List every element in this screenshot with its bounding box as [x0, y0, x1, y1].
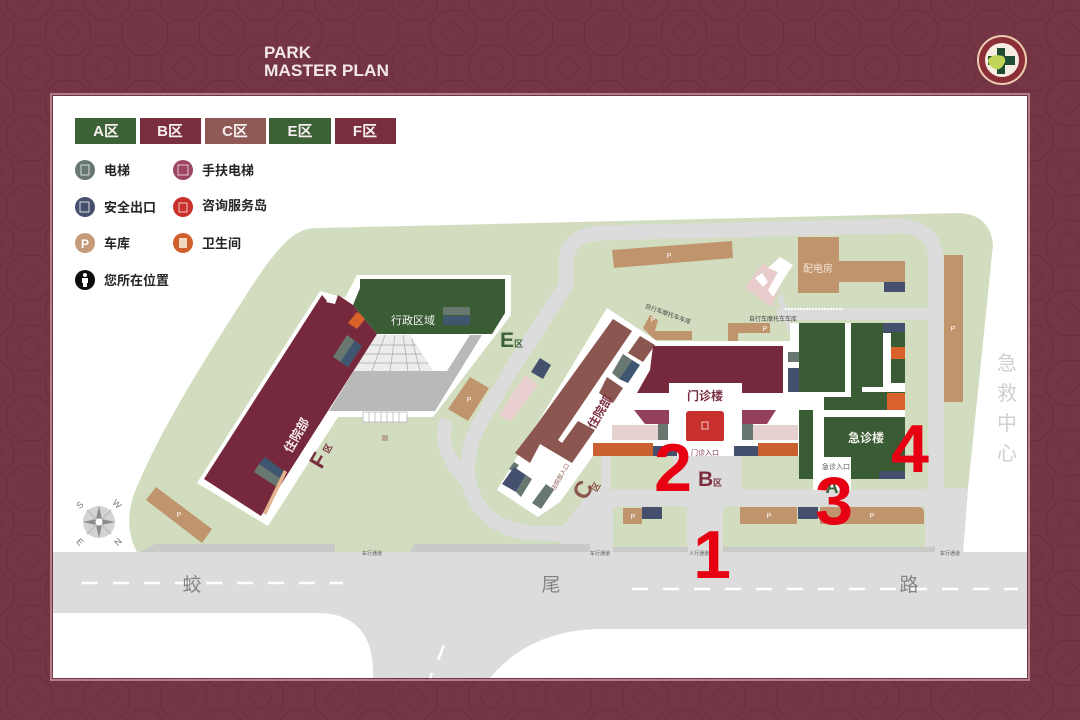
- red callout numbers: 1: [693, 517, 731, 593]
- emergency center label: 心: [997, 443, 1017, 465]
- main road: [53, 552, 1027, 678]
- parking labels: P: [177, 512, 182, 519]
- legend: facilities: 您所在位置: [104, 273, 169, 288]
- legend: facilities: 车库: [104, 236, 130, 251]
- parking labels: P: [870, 269, 875, 276]
- zone label: C: 区: [589, 481, 603, 493]
- legend: facilities: [75, 160, 267, 290]
- white base: emergency complex: [790, 323, 905, 490]
- parking labels: P: [767, 513, 772, 520]
- legend: zones: F区: [353, 123, 377, 140]
- zone label: E: 区: [514, 339, 523, 349]
- zone label: B: 区: [713, 478, 722, 488]
- parking labels: P: [763, 326, 768, 333]
- bike parking labels: 自行车摩托车车库: [749, 315, 797, 323]
- red callout numbers: [654, 411, 929, 593]
- pink pavilion and icon: [499, 358, 551, 422]
- legend: facilities: P: [81, 237, 89, 251]
- compass: W: [110, 497, 124, 511]
- zone label: A: A: [826, 477, 838, 497]
- bike parking labels: [644, 302, 797, 326]
- road name: [182, 574, 919, 596]
- road markings: [82, 583, 1018, 678]
- building: F zone inpatient: 住院部: [281, 415, 313, 455]
- parking labels: P: [467, 397, 472, 404]
- road gate labels: 人行通道: [689, 550, 709, 557]
- legend: facilities: 手扶电梯: [202, 163, 254, 178]
- legend: zones: C区: [222, 123, 248, 140]
- building: E zone admin: 行政区域: [391, 313, 435, 327]
- bike parking labels: 自行车摩托车车库: [644, 302, 692, 326]
- parking labels: P: [631, 514, 636, 521]
- legend: zones: E区: [287, 123, 313, 140]
- red callout numbers: 3: [815, 463, 853, 539]
- legend: zones: [75, 118, 396, 144]
- road junction areas: [560, 452, 968, 553]
- zone label: F: F: [304, 448, 333, 472]
- legend: zones: B区: [157, 123, 183, 140]
- building: emergency complex: [788, 323, 905, 479]
- road name: 蛟: [182, 574, 202, 596]
- zone label: B: [698, 468, 722, 491]
- parking labels: P: [667, 253, 672, 260]
- emergency center label: 急: [997, 352, 1017, 375]
- legend: zones: A区: [93, 123, 119, 140]
- green site ground: [129, 213, 993, 552]
- building: C zone white base: [497, 308, 800, 517]
- entrance steps: [363, 412, 407, 422]
- zone label: B: B: [698, 468, 713, 491]
- glass canopy grid: [354, 335, 433, 371]
- building: emergency complex: 急诊入口: [822, 462, 850, 471]
- building: C zone inpatient: [502, 319, 655, 509]
- emergency center label: [997, 352, 1017, 465]
- building: E zone admin: [353, 279, 505, 334]
- building: outpatient: [593, 346, 798, 457]
- building: outpatient: 门诊入口: [691, 448, 719, 457]
- road gate labels: 车行通道: [940, 550, 960, 557]
- paved plaza: [329, 335, 482, 411]
- white courtyard wedge: [410, 335, 470, 371]
- parking labels: [177, 253, 956, 521]
- parking lots: [146, 241, 963, 543]
- road gate labels: 车行通道: [362, 550, 382, 557]
- icon: hospital logo: [977, 35, 1027, 85]
- title: PARK: [264, 44, 311, 62]
- road name: 尾: [541, 575, 561, 596]
- power room: 配电房: [803, 262, 833, 275]
- road gate labels: [362, 550, 960, 557]
- zone label: F: 区: [321, 442, 334, 455]
- building: C zone inpatient: 住院部入口: [549, 462, 571, 492]
- emergency center label: 中: [997, 412, 1017, 435]
- legend: facilities: 电梯: [104, 163, 130, 178]
- zone label: E: E: [500, 329, 514, 352]
- building: outpatient: 门诊楼: [687, 388, 723, 403]
- site roads: [444, 226, 936, 552]
- building: C zone inpatient: 住院部: [584, 392, 615, 431]
- zone label: C: C: [567, 476, 599, 505]
- road name: 路: [899, 574, 919, 596]
- legend: facilities: 咨询服务岛: [202, 198, 267, 213]
- panel: map frame: [51, 94, 1029, 680]
- zone label: E: [500, 329, 523, 352]
- legend: facilities: 安全出口: [104, 200, 156, 215]
- power room: [798, 237, 905, 293]
- navy exit markers: [642, 282, 905, 519]
- emergency center label: 救: [997, 382, 1017, 405]
- red callout numbers: 4: [891, 411, 929, 487]
- red callout numbers: 2: [654, 430, 692, 506]
- compass: N: [112, 536, 124, 548]
- title: [264, 44, 389, 80]
- compass: E: [74, 536, 86, 548]
- parking labels: P: [651, 317, 656, 324]
- building: emergency complex: 急诊楼: [848, 430, 884, 445]
- parking labels: P: [951, 326, 956, 333]
- legend: facilities: 卫生间: [202, 236, 241, 251]
- pink service building: [745, 257, 843, 309]
- title: MASTER PLAN: [264, 62, 389, 80]
- small icon: garden: [382, 435, 388, 441]
- road shoulder strips: [140, 544, 935, 552]
- road gate labels: 车行通道: [590, 550, 610, 557]
- building: F zone inpatient: [204, 295, 377, 516]
- parking labels: P: [870, 513, 875, 520]
- compass: S: [74, 499, 86, 511]
- panel: zone E and F courtyard: [197, 275, 511, 526]
- compass: [74, 497, 124, 548]
